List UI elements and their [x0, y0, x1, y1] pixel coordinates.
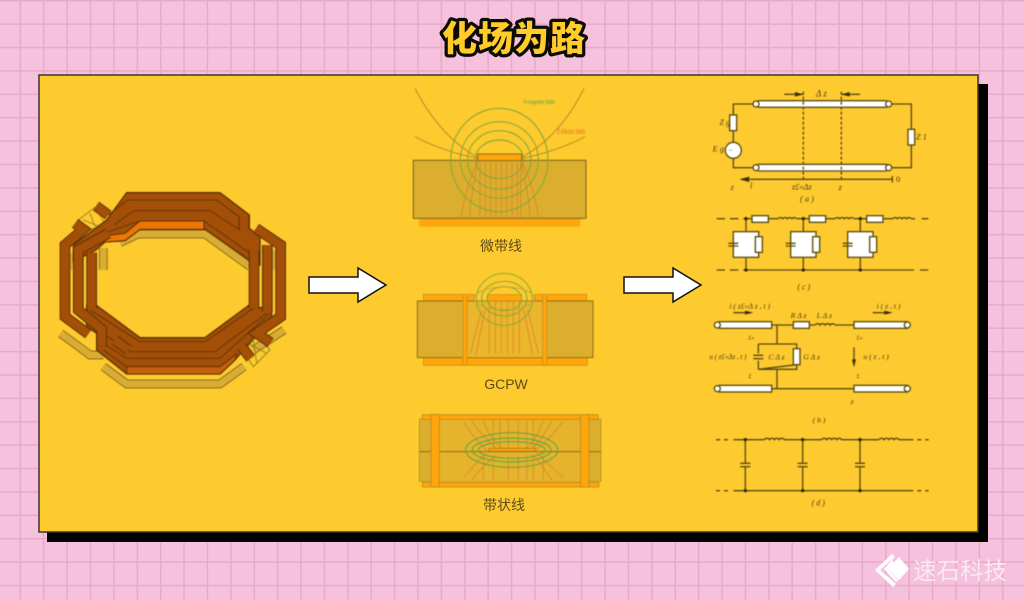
circuit a labels: E g — [712, 145, 724, 154]
diagram: microstrip — [413, 88, 586, 227]
circuit c inductors — [778, 218, 911, 219]
circuit a labels: Z g — [719, 118, 730, 127]
circuit b labels: u ( z , t ) — [863, 352, 889, 361]
arrow: lines to circuit — [624, 268, 701, 302]
arrow: coil to lines — [309, 268, 386, 302]
magnetic field curves outer — [415, 88, 585, 158]
circuit a labels: z — [838, 183, 843, 192]
circuit: LC ladder (d) — [716, 438, 929, 508]
circuit a labels: z — [730, 183, 735, 192]
circuit b labels: ( b ) — [813, 416, 826, 425]
circuit a labels: Z 1 — [916, 132, 927, 141]
circuit d caption: ( d ) — [812, 499, 825, 508]
circuit b labels: C Δ z — [768, 352, 785, 361]
title: 化场为路 — [442, 20, 586, 59]
diagram: microstrip: E-Electric fields — [557, 127, 586, 136]
coil vertical traces fill — [65, 206, 281, 358]
stripline electric lines — [463, 420, 563, 480]
circuit b labels: £­ — [857, 374, 860, 380]
label: microstrip: 微带线 — [480, 238, 522, 254]
circuit b labels — [709, 302, 901, 425]
microstrip substrate — [413, 160, 586, 218]
circuit a dashed guides — [803, 92, 841, 180]
circuit a labels: ~ — [729, 148, 733, 155]
circuit c nodes — [744, 217, 862, 272]
circuit b inductor — [815, 324, 835, 325]
coil top highlight — [103, 221, 204, 242]
coil front face — [127, 354, 237, 374]
circuit d nodes — [744, 438, 862, 492]
circuit: section model (b) — [709, 302, 910, 425]
coil bottom band — [87, 305, 272, 374]
coil vertical traces outline — [65, 206, 281, 358]
circuit b labels: z — [850, 397, 854, 406]
stripline ground planes — [422, 415, 599, 487]
circuit b labels: i ( z£«Δ z , t ) — [729, 302, 771, 311]
microstrip magnetic circles — [451, 108, 548, 212]
circuit b parts — [714, 322, 910, 392]
circuit b arrows — [733, 313, 889, 362]
GCPW electric lines — [471, 302, 538, 355]
circuit b labels: R Δ z — [790, 311, 807, 320]
panel: main — [39, 75, 988, 542]
label: stripline: 带状线 — [483, 497, 525, 513]
circuit b wires — [758, 325, 854, 389]
circuit a labels: z£«Δz — [791, 182, 812, 191]
stripline substrate — [419, 419, 601, 481]
logo: diamond mark — [875, 554, 909, 587]
circuit a arrows — [750, 94, 892, 183]
circuit b labels: i ( z , t ) — [877, 302, 901, 311]
coil turn edges — [90, 200, 270, 367]
circuit: transmission line (a) — [712, 89, 927, 204]
circuit d inductors — [764, 438, 899, 440]
circuit c caption: ( c ) — [797, 282, 811, 291]
label: GCPW: GCPW — [484, 376, 529, 392]
circuit a labels — [712, 89, 927, 204]
diagram: GCPW — [417, 273, 593, 365]
microstrip ground — [419, 219, 580, 227]
circuit a labels: Δ z — [815, 89, 827, 99]
label: fields: H-magnetic fields — [523, 99, 555, 106]
stripline magnetic ellipses — [466, 433, 558, 467]
circuit a labels: l — [750, 182, 753, 191]
circuit b labels: L Δ z — [816, 311, 832, 320]
icon: octagonal coil — [61, 193, 284, 384]
circuit b labels: £« — [748, 335, 754, 341]
GCPW top and bottom metal — [423, 294, 587, 365]
circuit a conductors — [725, 101, 915, 171]
circuit: RLGC ladder (c) — [717, 216, 928, 291]
stripline conductor — [489, 448, 536, 451]
circuit c shunt blocks — [746, 219, 860, 270]
circuit d capacitors — [740, 440, 865, 491]
GCPW magnetic arcs — [476, 273, 532, 325]
coil base layer — [61, 234, 284, 384]
logo: wordmark: 速石科技 — [913, 558, 1007, 584]
circuit a labels: 0 — [896, 175, 900, 184]
GCPW vias — [463, 294, 547, 365]
diagram: stripline — [419, 415, 601, 487]
circuit a labels: ( a ) — [800, 195, 814, 204]
circuit b labels: £« — [857, 335, 863, 341]
microstrip electric lines — [461, 161, 538, 217]
GCPW substrate — [417, 301, 593, 358]
circuit b labels: u ( z£«Δz , t ) — [709, 353, 747, 361]
circuit d rails — [716, 440, 929, 491]
GCPW centre — [467, 301, 543, 357]
microstrip trace — [478, 154, 522, 161]
circuit a wires — [733, 104, 911, 168]
circuit b labels: £­ — [748, 374, 751, 380]
coil top band — [73, 193, 260, 265]
circuit c resistors — [752, 216, 883, 222]
coil via cages — [78, 207, 270, 367]
circuit c rails — [717, 219, 928, 270]
circuit b labels: G Δ z — [803, 352, 820, 361]
